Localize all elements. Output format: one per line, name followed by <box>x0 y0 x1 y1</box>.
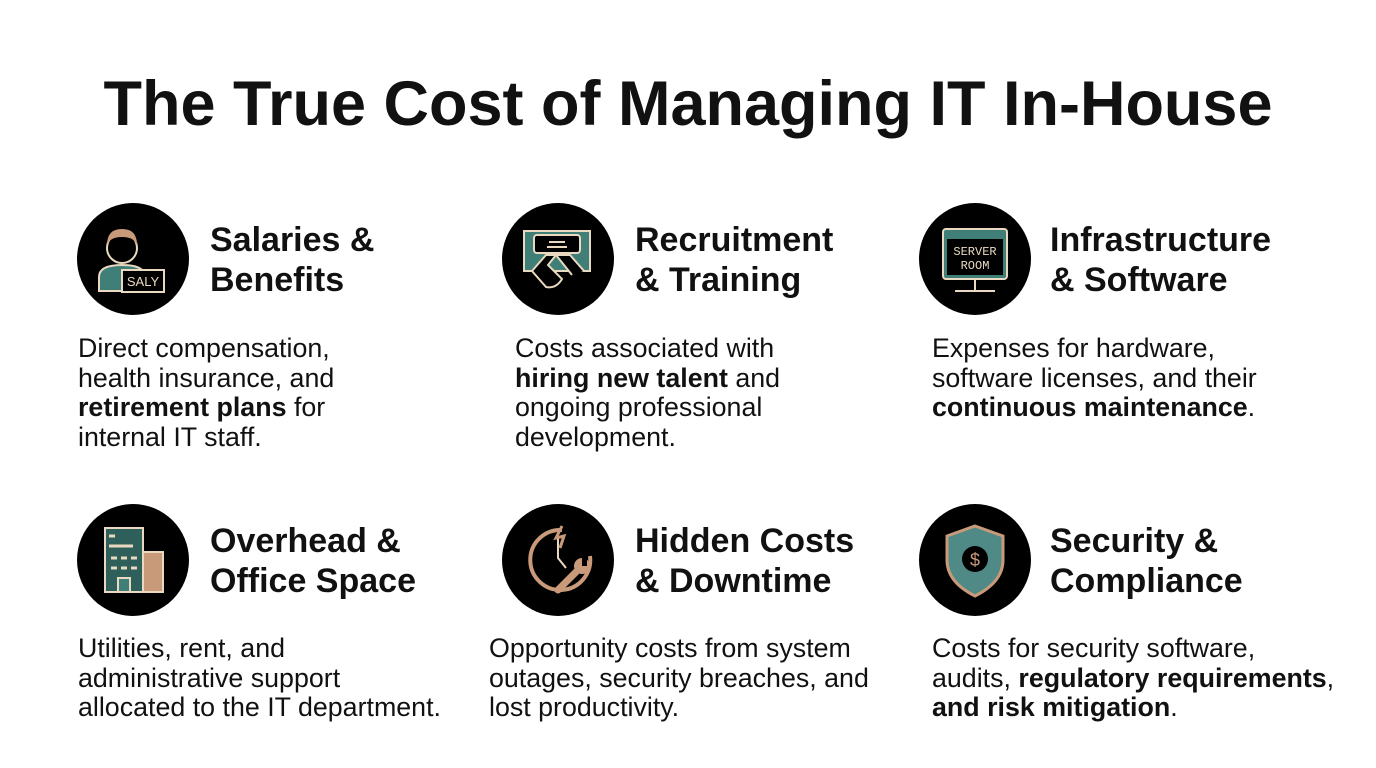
text <box>932 633 1334 722</box>
icon: server: ROOM <box>961 259 989 273</box>
text: health insurance, and <box>78 362 334 392</box>
icon: person salary <box>77 203 189 315</box>
text: lost productivity. <box>489 692 679 722</box>
text: software licenses, and their <box>932 362 1257 392</box>
heading: Security & <box>1050 522 1218 560</box>
panel: overhead <box>77 504 441 722</box>
text: Costs associated with <box>515 333 774 363</box>
heading: & Software <box>1050 261 1228 299</box>
heading <box>1050 522 1243 600</box>
heading <box>210 522 416 600</box>
text: Utilities, rent, and <box>78 633 285 663</box>
icon: handshake <box>502 203 614 315</box>
text <box>932 333 1257 422</box>
text: Opportunity costs from system <box>489 633 851 663</box>
icon: shield dollar: $ <box>970 550 980 570</box>
title: The True Cost of Managing IT In-House <box>103 69 1272 139</box>
panel: infrastructure <box>919 203 1271 422</box>
icon: clock wrench <box>502 504 614 616</box>
text: retirement plans for <box>78 392 325 422</box>
text <box>489 633 869 722</box>
heading: Benefits <box>210 261 344 299</box>
text: outages, security breaches, and <box>489 662 869 692</box>
icon: server <box>919 203 1031 315</box>
text <box>78 333 334 452</box>
heading: Recruitment <box>635 221 833 259</box>
heading: Infrastructure <box>1050 221 1271 259</box>
text: internal IT staff. <box>78 422 262 452</box>
text: ongoing professional <box>515 392 762 422</box>
text <box>515 333 780 452</box>
text: hiring new talent and <box>515 362 780 392</box>
panel: security <box>919 504 1334 722</box>
text: Costs for security software, <box>932 633 1255 663</box>
icon: person salary: SALY <box>127 274 159 289</box>
text: Direct compensation, <box>78 333 330 363</box>
heading <box>635 522 854 600</box>
icon: building <box>77 504 189 616</box>
icon: shield dollar <box>919 504 1031 616</box>
text: Expenses for hardware, <box>932 333 1215 363</box>
heading: & Training <box>635 261 801 299</box>
heading: Hidden Costs <box>635 522 854 560</box>
icon: server: SERVER <box>953 245 997 259</box>
text: administrative support <box>78 662 340 692</box>
heading: Overhead & <box>210 522 401 560</box>
text: audits, regulatory requirements, <box>932 662 1334 692</box>
heading: Salaries & <box>210 221 374 259</box>
text: allocated to the IT department. <box>78 692 441 722</box>
text <box>78 633 441 722</box>
heading <box>635 221 833 299</box>
panel: hidden costs <box>489 504 869 722</box>
heading <box>1050 221 1271 299</box>
text: continuous maintenance. <box>932 392 1255 422</box>
text: development. <box>515 422 676 452</box>
text: and risk mitigation. <box>932 692 1178 722</box>
heading <box>210 221 374 299</box>
heading: Office Space <box>210 562 416 600</box>
panel: salaries <box>77 203 374 452</box>
panel: recruitment <box>502 203 833 452</box>
heading: & Downtime <box>635 562 831 600</box>
heading: Compliance <box>1050 562 1243 600</box>
